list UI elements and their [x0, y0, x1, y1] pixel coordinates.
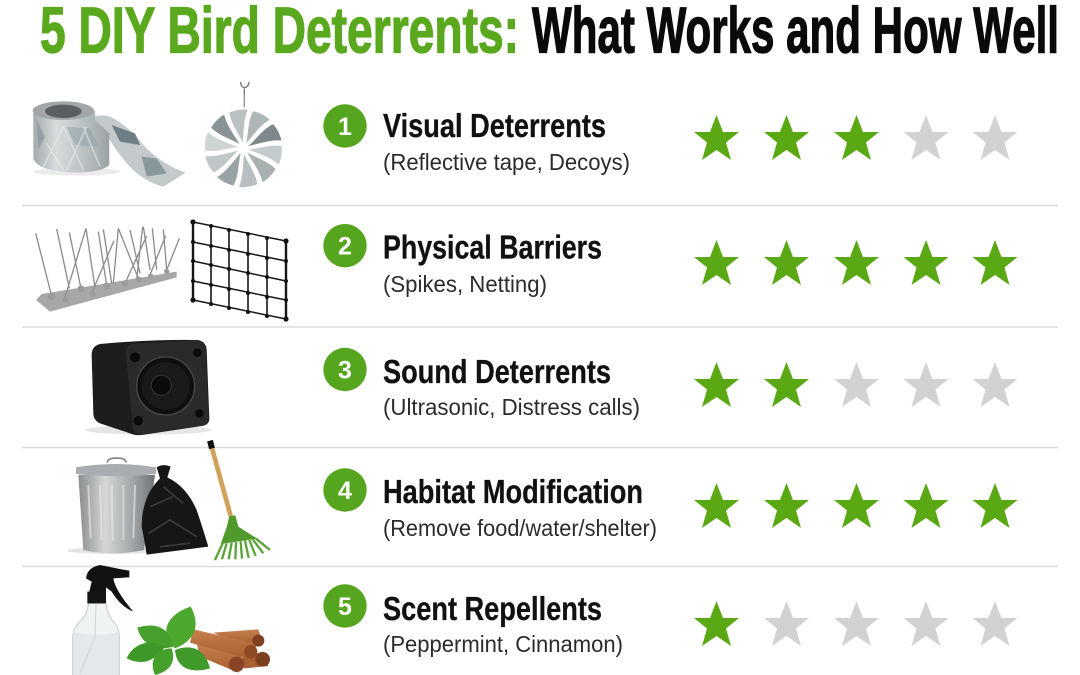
row 2: number badge: [323, 224, 367, 267]
icon: black garbage bag: [142, 465, 208, 555]
icon: cinnamon sticks: [190, 629, 270, 673]
icon: netting: [190, 219, 289, 322]
row 1: number badge: [323, 104, 367, 148]
row 3: rating stars: [694, 362, 1018, 407]
row 4: heading: Habitat Modification: [383, 473, 643, 510]
row 1: examples: (Reflective tape, Decoys): [383, 149, 630, 175]
row 5: number badge: 5: [338, 593, 352, 621]
icon: mint leaves: [127, 607, 210, 675]
row 2: number badge: 2: [338, 233, 352, 261]
icon: reflective tape roll: [33, 101, 186, 187]
title: [40, 0, 1059, 66]
row 4: examples: (Remove food/water/shelter): [383, 515, 657, 541]
icon: rake: [210, 441, 270, 560]
row 3: examples: (Ultrasonic, Distress calls): [383, 394, 640, 420]
row 5: examples: (Peppermint, Cinnamon): [383, 631, 623, 657]
row 2: heading: Physical Barriers: [383, 228, 602, 266]
row 1: rating stars: [694, 115, 1018, 160]
icon: bird spikes: [36, 227, 179, 312]
row 2: rating stars: [694, 240, 1018, 285]
row 1: number badge: 1: [338, 113, 352, 141]
row 4: rating stars: [694, 483, 1018, 528]
icon: speaker: [85, 340, 212, 435]
icon: reflective pinwheel: [199, 82, 287, 191]
row 5: number badge: [323, 584, 367, 628]
row 5: heading: Scent Repellents: [383, 590, 602, 627]
row 3: heading: Sound Deterrents: [383, 353, 611, 390]
icon: spray bottle: [73, 565, 133, 675]
row 4: number badge: 4: [338, 477, 352, 505]
row 3: number badge: 3: [338, 356, 352, 384]
row 2: examples: (Spikes, Netting): [383, 271, 547, 297]
row 5: rating stars: [694, 601, 1018, 646]
icon: trash can: [67, 458, 160, 554]
row 1: heading: Visual Deterrents: [383, 107, 606, 144]
row 3: number badge: [323, 348, 367, 391]
row 4: number badge: [323, 468, 367, 512]
